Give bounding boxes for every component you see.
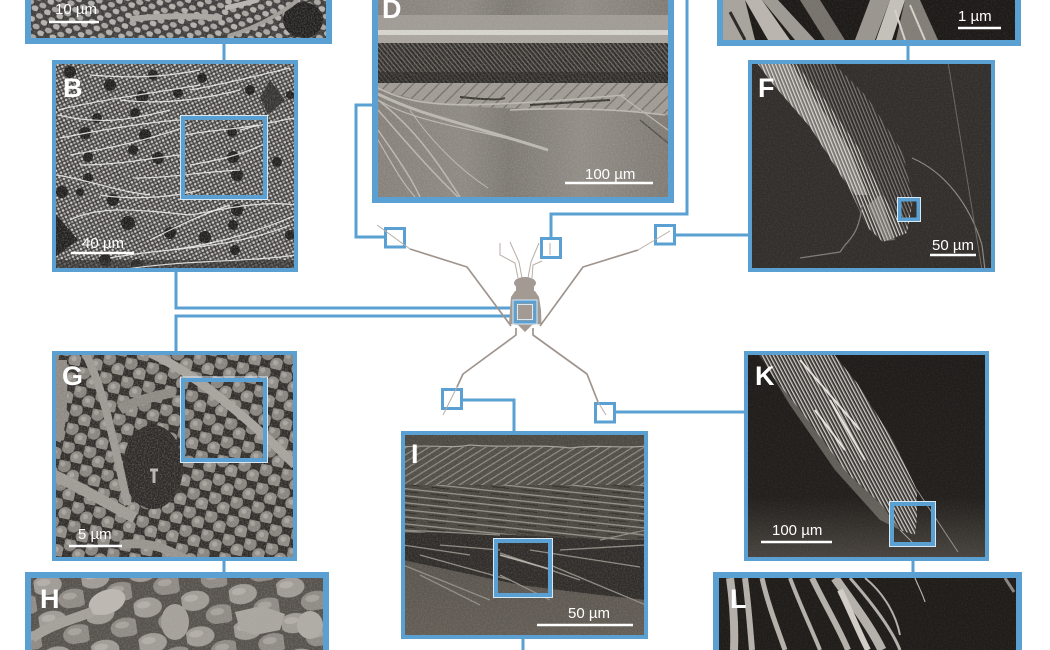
- scale bar E: 1 µm: [958, 8, 992, 25]
- panel E: partial high magnification micrograph: [720, 0, 1018, 43]
- panel A: partial SEM micrograph: [28, 0, 329, 41]
- panel letter K: K: [755, 361, 775, 391]
- icon: insect silhouette: [377, 225, 670, 415]
- panel letter H: H: [40, 584, 60, 614]
- scale bar B: 40 µm: [82, 235, 124, 252]
- panel G: SEM of microsetae around a pit: [54, 353, 295, 562]
- panel letter L: L: [730, 584, 746, 614]
- scale bar I: [537, 605, 633, 625]
- panel K: hind leg tip micrograph: [746, 353, 987, 559]
- panel letter G: G: [62, 361, 83, 391]
- scale bar I: 50 µm: [568, 605, 610, 622]
- antennae: [500, 242, 550, 278]
- panel D: leg segment micrograph: [375, 0, 671, 200]
- panel F: leg tip micrograph on dark background: [750, 62, 993, 270]
- inset box K: [890, 502, 936, 546]
- scale bar F: 50 µm: [932, 237, 974, 254]
- panel letter B: B: [63, 73, 82, 103]
- scale bar D: 100 µm: [585, 166, 635, 183]
- scale bar K: 100 µm: [772, 522, 822, 539]
- panel letter I: I: [411, 439, 419, 469]
- scale bar G: 5 µm: [78, 526, 112, 543]
- icon: locator squares on insect legs: [386, 226, 674, 422]
- connector lines between panels and insect: [176, 0, 913, 650]
- inset box I: [494, 538, 552, 598]
- scale bar K: [761, 522, 832, 542]
- body: [509, 277, 542, 332]
- scale bar B: [71, 235, 134, 253]
- inset box F: [898, 198, 920, 222]
- inset box B: [180, 116, 268, 200]
- scale bar A: [49, 1, 99, 22]
- scale bar A: 10 µm: [55, 1, 97, 18]
- panel I: middle leg micrograph with setae rows: [403, 433, 646, 637]
- front and middle legs: [377, 225, 670, 415]
- scale bar E: [958, 8, 1001, 28]
- scale bar G: [69, 526, 122, 546]
- panel B: SEM micrograph with dimples and hairs: [54, 62, 296, 271]
- inset box G: [180, 377, 268, 462]
- scale bar D: [565, 166, 653, 183]
- panel letter F: F: [758, 73, 774, 103]
- inset box on body: [513, 300, 537, 324]
- panel L: close-up of hind leg setae: [716, 575, 1019, 650]
- panel H: close-up of microsetae: [28, 575, 326, 650]
